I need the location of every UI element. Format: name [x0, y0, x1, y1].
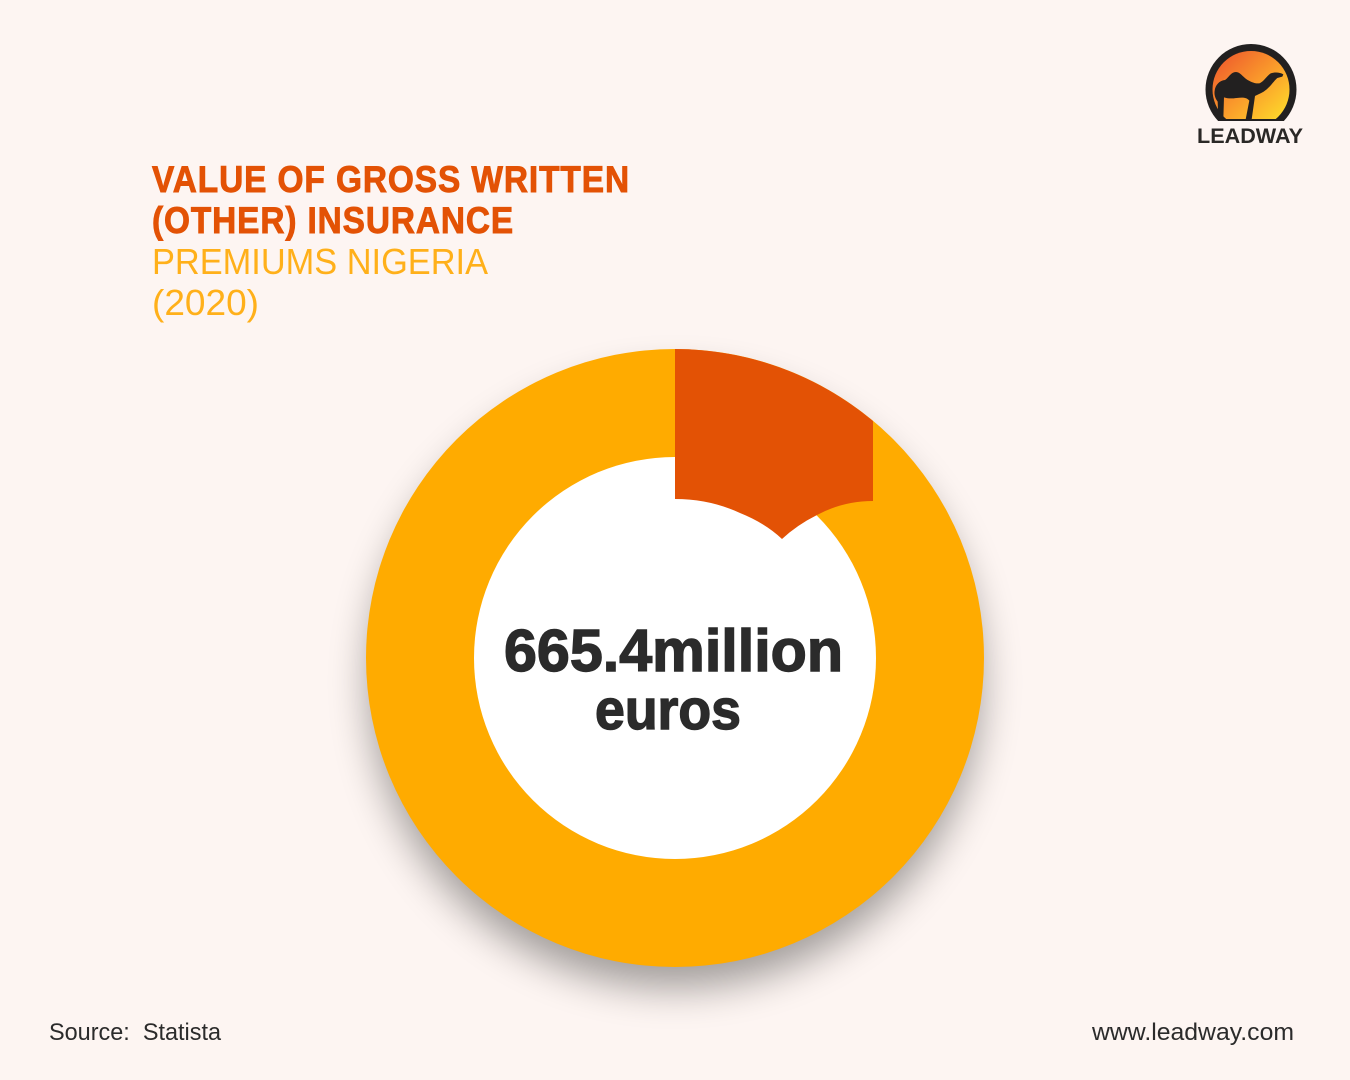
title bold line 1: VALUE OF GROSS WRITTEN [152, 159, 630, 200]
icon: camel in sun [1206, 44, 1296, 121]
logo: Leadway [1197, 44, 1303, 148]
website: www.leadway.com [1091, 1019, 1294, 1046]
donut centre [474, 457, 876, 859]
subtitle line 1: PREMIUMS NIGERIA [152, 241, 488, 282]
logo wordmark: LEADWAY [1197, 125, 1303, 148]
title [152, 159, 630, 323]
subtitle line 2: (2020) [152, 282, 259, 323]
source note: Source: Statista [49, 1019, 222, 1046]
centre value [504, 618, 843, 742]
donut segment: highlighted share [675, 349, 873, 539]
centre value: 665.4million [504, 618, 843, 684]
donut chart [366, 349, 984, 988]
centre value: euros [595, 678, 741, 742]
title bold line 2: (OTHER) INSURANCE [152, 200, 514, 241]
donut ring: total [366, 349, 984, 967]
